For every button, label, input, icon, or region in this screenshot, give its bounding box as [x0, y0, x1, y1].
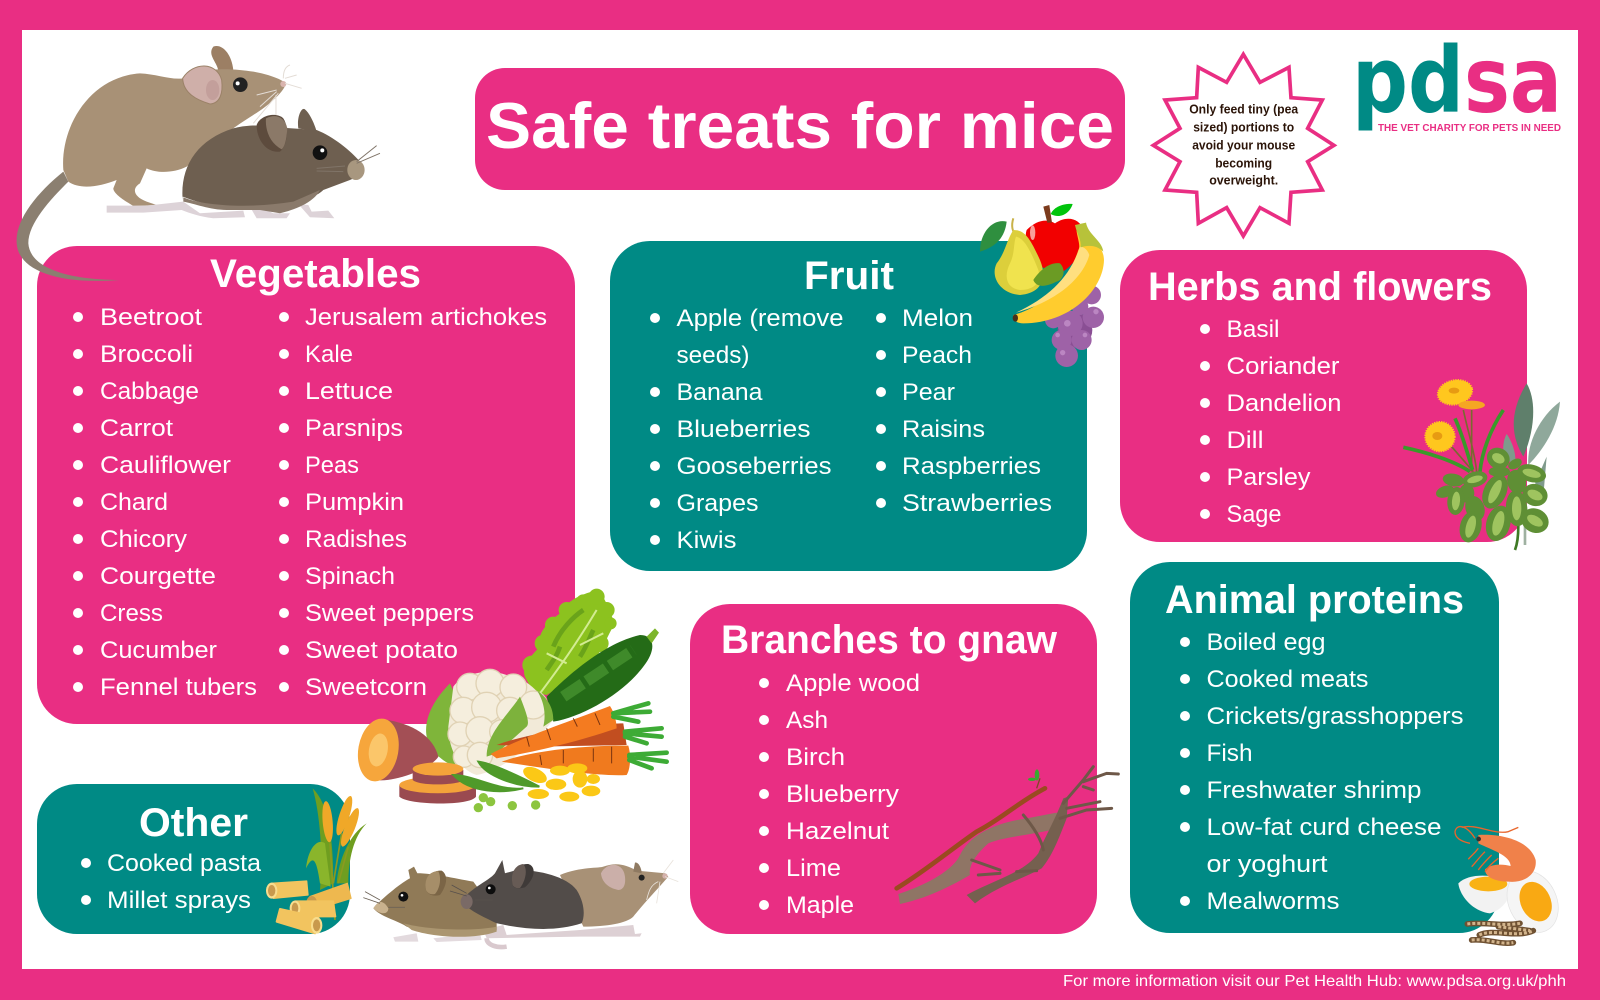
- callout: portion warning starburst: overweight.: [1209, 174, 1278, 188]
- callout: portion warning starburst: sized) portions to: [1193, 120, 1295, 134]
- panel: fruit: Apple (remove: [676, 305, 844, 332]
- panel: vegetables: Broccoli: [100, 341, 193, 368]
- panel: other: Millet sprays: [107, 887, 251, 914]
- panel: vegetables: Cucumber: [100, 637, 217, 664]
- icon: two mice, top left: [17, 46, 380, 281]
- panel: branches to gnaw: Hazelnut: [786, 818, 889, 845]
- panel: fruit: seeds): [676, 342, 750, 369]
- panel: vegetables: Beetroot: [100, 304, 202, 331]
- panel: vegetables: Fennel tubers: [100, 674, 257, 701]
- panel: fruit: Melon: [902, 305, 973, 332]
- panel: branches to gnaw: Birch: [786, 744, 845, 771]
- icon: three mice, bottom: [363, 860, 678, 947]
- icon: vegetables pile: [353, 589, 667, 812]
- panel: herbs and flowers: [1120, 250, 1527, 542]
- panel: branches to gnaw: Maple: [786, 892, 854, 919]
- panel: vegetables: Spinach: [305, 563, 395, 590]
- panel: vegetables: Cress: [100, 600, 163, 627]
- logo: pdsa: pd: [1352, 28, 1464, 134]
- panel: vegetables: [37, 246, 575, 724]
- panel: herbs and flowers: Dandelion: [1226, 390, 1342, 417]
- panel: fruit: Blueberries: [676, 416, 810, 443]
- panel: animal proteins: Crickets/grasshoppers: [1206, 703, 1464, 730]
- footer: For more information visit our Pet Health Hub: www.pdsa.org.uk/phh: [1063, 973, 1566, 990]
- panel: vegetables: Vegetables: [210, 252, 421, 296]
- panel: branches to gnaw: Branches to gnaw: [721, 618, 1058, 662]
- panel: animal proteins: Fish: [1206, 740, 1252, 767]
- panel: fruit: [610, 241, 1087, 571]
- panel: animal proteins: or yoghurt: [1206, 851, 1328, 878]
- panel: herbs and flowers: Basil: [1226, 316, 1280, 343]
- panel: vegetables: Cauliflower: [100, 452, 231, 479]
- logo: pdsa: [1352, 28, 1562, 134]
- panel: animal proteins: Animal proteins: [1165, 578, 1464, 622]
- panel: herbs and flowers: Dill: [1226, 427, 1264, 454]
- panel: vegetables: Peas: [305, 452, 359, 479]
- icon: fruit bowl: [980, 204, 1104, 367]
- panel: branches to gnaw: Ash: [786, 707, 828, 734]
- panel: vegetables: Lettuce: [305, 378, 393, 405]
- panel: herbs and flowers: Herbs and flowers: [1148, 265, 1492, 309]
- panel: animal proteins: Freshwater shrimp: [1206, 777, 1422, 804]
- panel: vegetables: Sweet potato: [305, 637, 458, 664]
- title: Safe treats for mice: [486, 89, 1114, 162]
- callout: portion warning starburst: becoming: [1215, 156, 1272, 170]
- panel: herbs and flowers: Coriander: [1226, 353, 1340, 380]
- panel: fruit: Kiwis: [676, 527, 736, 554]
- panel: other: Cooked pasta: [107, 850, 261, 877]
- panel: animal proteins: [1130, 562, 1499, 933]
- panel: fruit: Pear: [902, 379, 955, 406]
- logo: pdsa: THE VET CHARITY FOR PETS IN NEED: [1378, 122, 1561, 134]
- title: [475, 68, 1125, 190]
- panel: branches to gnaw: [690, 604, 1097, 934]
- logo: pdsa: sa: [1464, 28, 1562, 134]
- panel: animal proteins: Cooked meats: [1206, 666, 1368, 693]
- icon: shrimp, egg and mealworms: [1455, 826, 1568, 943]
- panel: vegetables: Radishes: [305, 526, 407, 553]
- panel: fruit: Peach: [902, 342, 972, 369]
- panel: fruit: Gooseberries: [676, 453, 832, 480]
- panel: branches to gnaw: Apple wood: [786, 670, 920, 697]
- panel: fruit: Grapes: [676, 490, 758, 517]
- panel: animal proteins: Mealworms: [1206, 888, 1340, 915]
- panel: branches to gnaw: Lime: [786, 855, 841, 882]
- panel: vegetables: Carrot: [100, 415, 173, 442]
- panel: vegetables: Kale: [305, 341, 353, 368]
- panel: animal proteins: Boiled egg: [1206, 629, 1326, 656]
- icon: branches: [897, 767, 1118, 904]
- panel: vegetables: Sweetcorn: [305, 674, 427, 701]
- panel: vegetables: Sweet peppers: [305, 600, 474, 627]
- panel: herbs and flowers: Sage: [1226, 501, 1282, 528]
- panel: fruit: Raisins: [902, 416, 985, 443]
- panel: fruit: Fruit: [804, 254, 894, 298]
- icon: dandelion, basil and sage: [1403, 377, 1560, 550]
- panel: other: [37, 784, 350, 934]
- panel: vegetables: Chard: [100, 489, 168, 516]
- panel: vegetables: Chicory: [100, 526, 188, 553]
- panel: vegetables: Courgette: [100, 563, 216, 590]
- panel: animal proteins: Low-fat curd cheese: [1206, 814, 1442, 841]
- panel: vegetables: Parsnips: [305, 415, 403, 442]
- icon: wheat and pasta: [266, 788, 367, 934]
- panel: branches to gnaw: Blueberry: [786, 781, 900, 808]
- panel: other: Other: [139, 801, 248, 845]
- panel: vegetables: Jerusalem artichokes: [305, 304, 547, 331]
- panel: fruit: Raspberries: [902, 453, 1041, 480]
- callout: portion warning starburst: [1153, 54, 1334, 236]
- panel: vegetables: Pumpkin: [305, 489, 404, 516]
- panel: fruit: Banana: [676, 379, 763, 406]
- panel: herbs and flowers: Parsley: [1226, 464, 1311, 491]
- panel: fruit: Strawberries: [902, 490, 1052, 517]
- callout: portion warning starburst: avoid your mouse: [1192, 138, 1295, 152]
- panel: vegetables: Cabbage: [100, 378, 199, 405]
- callout: portion warning starburst: Only feed tiny (pea: [1189, 102, 1299, 116]
